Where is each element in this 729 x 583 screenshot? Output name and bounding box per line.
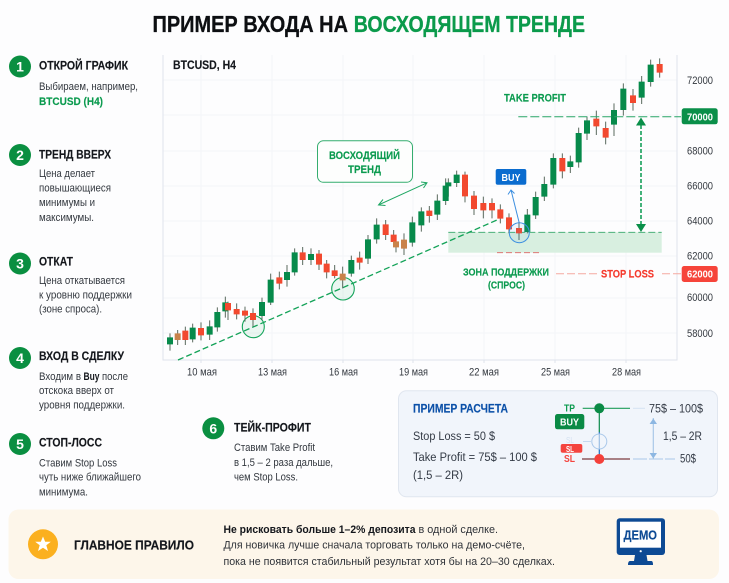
date axis labels: 25 мая bbox=[541, 367, 570, 379]
arrow: buy entry bbox=[508, 190, 529, 243]
step 6: Ставим Take Profit bbox=[234, 442, 315, 454]
date axis labels: 13 мая bbox=[258, 367, 287, 379]
main rule heading: ГЛАВНОЕ ПРАВИЛО bbox=[74, 537, 194, 552]
callout: uptrend label bbox=[318, 141, 412, 182]
buy badge bbox=[496, 169, 526, 185]
date axis labels: 16 мая bbox=[329, 367, 358, 379]
support zone label: ЗОНА ПОДДЕРЖКИ bbox=[463, 267, 549, 279]
tag: stop loss price bbox=[682, 266, 718, 282]
step 5: 5 bbox=[16, 436, 24, 452]
step 6: 6 bbox=[209, 420, 217, 436]
step 6: ТЕЙК-ПРОФИТ bbox=[234, 420, 312, 435]
title bbox=[152, 11, 585, 37]
step 6: чем Stop Loss. bbox=[234, 472, 298, 484]
step 2: ТРЕНД ВВЕРХ bbox=[39, 148, 111, 162]
calculation text: Take Profit = 75$ – 100 $ bbox=[413, 450, 537, 464]
stop loss line and label bbox=[556, 269, 682, 281]
panel: calculation example bbox=[398, 391, 718, 497]
tag: stop loss price: 62000 bbox=[687, 269, 713, 281]
price axis labels bbox=[687, 75, 713, 340]
support zone label: (СПРОС) bbox=[488, 280, 525, 292]
step 4: уровня поддержки. bbox=[39, 400, 125, 412]
chart heading: BTCUSD, H4 bbox=[173, 58, 236, 72]
step 4 bbox=[9, 347, 128, 412]
date axis labels: 10 мая bbox=[187, 367, 217, 379]
step 5 bbox=[9, 433, 141, 499]
take profit label: TAKE PROFIT bbox=[504, 93, 566, 105]
step 1: 1 bbox=[16, 58, 24, 74]
price axis labels: 64000 bbox=[687, 215, 713, 227]
support zone label bbox=[463, 267, 549, 292]
risk reward diagram: SL bbox=[564, 454, 575, 465]
icon: star badge bbox=[28, 529, 58, 559]
step 5: чуть ниже ближайшего bbox=[39, 472, 141, 484]
tag: take profit price: 70000 bbox=[687, 111, 713, 123]
step 2 bbox=[9, 144, 111, 224]
step 2: максимумы. bbox=[39, 212, 94, 224]
step 4: ВХОД В СДЕЛКУ bbox=[39, 349, 124, 363]
step 4: 4 bbox=[16, 350, 24, 366]
step 5: минимума. bbox=[39, 487, 88, 499]
risk reward diagram bbox=[555, 402, 703, 466]
main rule text: в одной сделке. bbox=[418, 524, 498, 536]
step 6 bbox=[202, 417, 333, 484]
panel: main rule banner bbox=[8, 510, 719, 579]
step 1: ОТКРОЙ ГРАФИК bbox=[39, 58, 129, 72]
calculation text: (1,5 – 2R) bbox=[413, 468, 463, 482]
risk reward diagram: TP bbox=[564, 404, 575, 415]
step 4: отскока вверх от bbox=[39, 385, 114, 397]
main rule text: Для новичка лучше сначала торговать только на демо-счёте, bbox=[224, 540, 525, 552]
date axis labels: 28 мая bbox=[612, 367, 641, 379]
risk reward diagram: SL bbox=[566, 436, 574, 445]
step 2: минимумы и bbox=[39, 197, 95, 209]
date axis labels: 19 мая bbox=[399, 367, 428, 379]
price axis labels: 68000 bbox=[687, 145, 713, 157]
buy badge: BUY bbox=[502, 172, 520, 184]
date axis labels: 22 мая bbox=[469, 367, 499, 379]
main rule text: пока не появится стабильный результат хотя бы на 20–30 сделках. bbox=[224, 556, 555, 568]
trend line bbox=[178, 220, 497, 360]
step 6: в 1,5 – 2 раза дальше, bbox=[234, 457, 333, 469]
support touch circles bbox=[242, 277, 354, 338]
title: ВОСХОДЯЩЕМ ТРЕНДЕ bbox=[354, 11, 585, 37]
panel: steps list bbox=[9, 56, 333, 499]
chart frame and grid bbox=[163, 55, 677, 363]
callout: uptrend label: ВОСХОДЯЩИЙ bbox=[329, 149, 400, 162]
step 3: 3 bbox=[16, 256, 24, 272]
step 5: СТОП-ЛОСС bbox=[39, 436, 102, 450]
step 5: Ставим Stop Loss bbox=[39, 458, 118, 470]
step 4: Входим в bbox=[39, 371, 81, 383]
step 2: 2 bbox=[16, 147, 24, 163]
stop loss line and label: STOP LOSS bbox=[601, 269, 654, 281]
risk reward diagram: 50$ bbox=[680, 452, 696, 466]
main rule text: Не рисковать больше 1–2% депозита bbox=[224, 524, 416, 536]
arrow: target range bbox=[636, 118, 646, 232]
calculation text bbox=[413, 429, 537, 482]
title: ПРИМЕР ВХОДА НА bbox=[152, 11, 348, 37]
calculation heading: ПРИМЕР РАСЧЕТА bbox=[413, 404, 508, 416]
icon: demo monitor: ДЕМО bbox=[624, 528, 657, 542]
icon: demo monitor bbox=[617, 518, 665, 565]
price axis labels: 60000 bbox=[687, 292, 713, 304]
take profit line bbox=[518, 116, 681, 118]
step 4: после bbox=[102, 371, 128, 383]
step 1: Выбираем, например, bbox=[39, 81, 138, 93]
step 1 bbox=[9, 56, 138, 108]
risk reward diagram: SL bbox=[566, 445, 574, 454]
step 3 bbox=[9, 252, 132, 316]
date axis labels bbox=[187, 367, 641, 379]
step 3: к уровню поддержки bbox=[39, 290, 132, 302]
price axis labels: 58000 bbox=[687, 328, 713, 340]
step 1: BTCUSD (H4) bbox=[39, 96, 103, 108]
step 4: Buy bbox=[84, 371, 100, 383]
tag: take profit price bbox=[682, 108, 718, 124]
risk reward diagram: BUY bbox=[560, 417, 579, 429]
callout: uptrend label: ТРЕНД bbox=[348, 164, 381, 176]
step 3: (зоне спроса). bbox=[39, 304, 102, 316]
risk reward diagram: 1,5 – 2R bbox=[663, 429, 702, 443]
price axis labels: 72000 bbox=[687, 75, 713, 87]
candlesticks bbox=[167, 58, 662, 351]
step 3: ОТКАТ bbox=[39, 254, 74, 268]
arrow: trend direction bbox=[378, 182, 427, 206]
panel: chart bbox=[163, 55, 718, 379]
step 3: Цена откатывается bbox=[39, 275, 125, 287]
main rule text bbox=[224, 524, 555, 568]
step 2: повышающиеся bbox=[39, 183, 111, 195]
risk reward diagram: 75$ – 100$ bbox=[649, 402, 703, 416]
calculation text: Stop Loss = 50 $ bbox=[413, 429, 495, 443]
price axis labels: 66000 bbox=[687, 180, 713, 192]
support zone bbox=[448, 232, 662, 253]
price axis labels: 62000 bbox=[687, 250, 713, 262]
step 2: Цена делает bbox=[39, 168, 95, 180]
